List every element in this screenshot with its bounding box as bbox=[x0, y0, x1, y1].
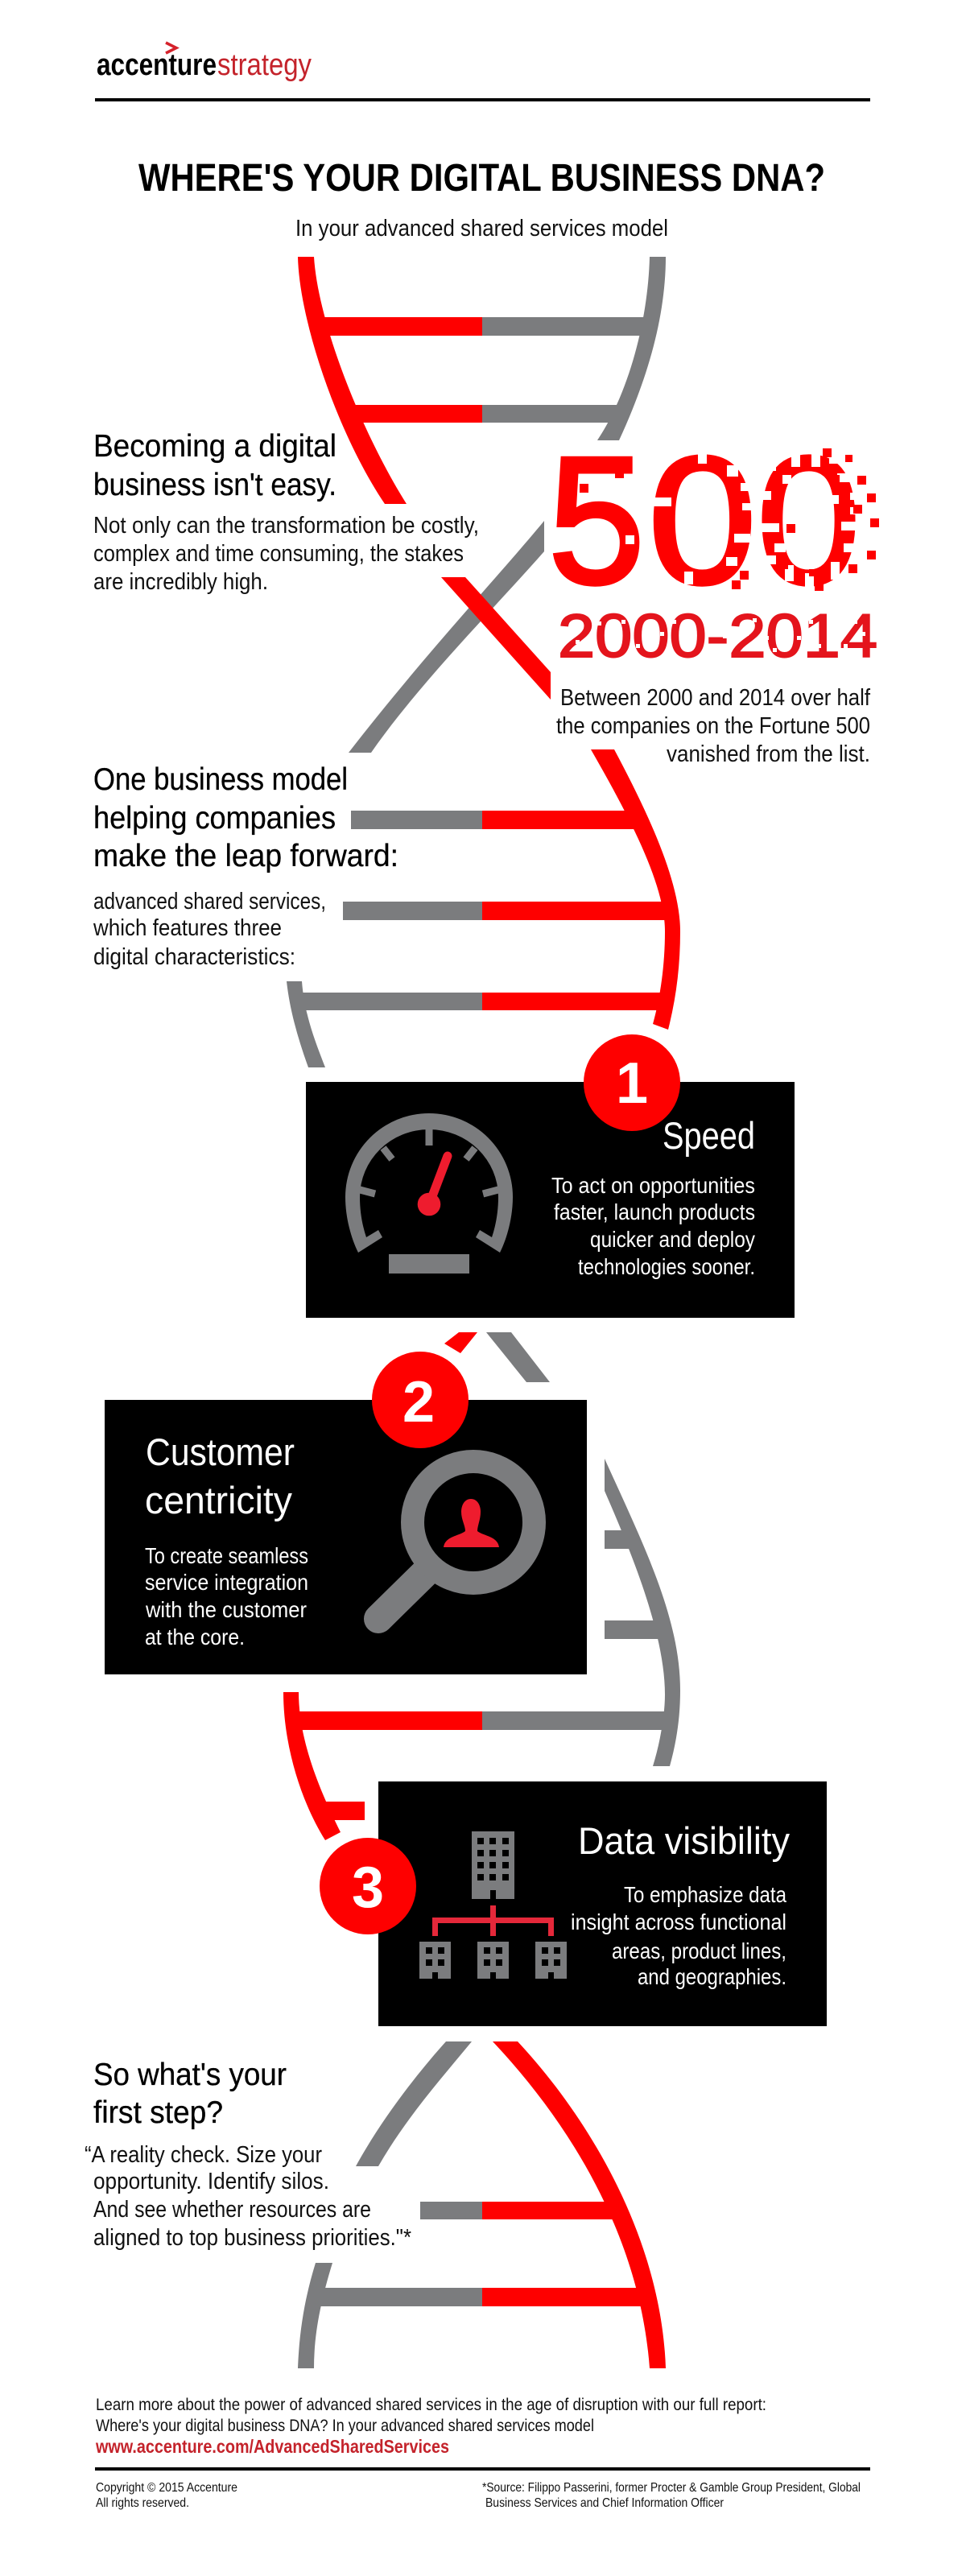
dna helix: section behind customer panel bbox=[283, 1332, 680, 1840]
speed description: quicker and deploy bbox=[590, 1227, 755, 1252]
big number: 2000-2014: 2000-2014 bbox=[558, 602, 877, 671]
panel: data visibility bbox=[378, 1781, 827, 2026]
footer: source bbox=[482, 2481, 861, 2510]
number badge 2 bbox=[372, 1352, 469, 1448]
customer description bbox=[145, 1543, 308, 1649]
speed description: faster, launch products bbox=[554, 1199, 755, 1224]
text block: becoming a digital business: Becoming a digital bbox=[93, 429, 336, 464]
text block: fortune 500 fact: the companies on the Fortune 500 bbox=[556, 713, 870, 739]
dna helix: top section bbox=[298, 257, 666, 504]
speed description bbox=[551, 1173, 755, 1279]
footer: learn more bbox=[95, 2395, 766, 2457]
speed description: technologies sooner. bbox=[578, 1254, 755, 1279]
text block: first step: “A reality check. Size your bbox=[85, 2142, 322, 2168]
text block: becoming a digital business: are incredibly high. bbox=[93, 569, 268, 595]
data visibility description: To emphasize data bbox=[624, 1882, 786, 1907]
number badge 1: 1 bbox=[616, 1051, 648, 1116]
data visibility description: insight across functional bbox=[571, 1909, 786, 1934]
text block: one business model: helping companies bbox=[93, 801, 336, 836]
text block: first step bbox=[85, 2058, 411, 2251]
data visibility heading: Data visibility bbox=[578, 1819, 790, 1862]
footer: copyright: All rights reserved. bbox=[96, 2496, 189, 2510]
logo: accenture strategy bbox=[97, 43, 312, 82]
dna helix: bottom section bbox=[298, 2041, 666, 2368]
big number: 500 disintegrating: 5 bbox=[548, 419, 645, 621]
text block: first step: opportunity. Identify silos. bbox=[93, 2169, 329, 2194]
text block: fortune 500 fact: vanished from the list. bbox=[667, 741, 870, 767]
text block: one business model: advanced shared services, bbox=[93, 889, 326, 914]
footer: learn more: Learn more about the power of advanced shared services in the age of disruption with our full report: bbox=[96, 2395, 766, 2414]
data visibility description: areas, product lines, bbox=[612, 1938, 786, 1963]
text block: fortune 500 fact bbox=[556, 685, 870, 767]
text block: becoming a digital business: Not only can the transformation be costly, bbox=[93, 513, 479, 539]
footer: source: Business Services and Chief Information Officer bbox=[485, 2496, 724, 2510]
big number: 500 disintegrating: 0 bbox=[757, 419, 861, 621]
footer: learn more: Where's your digital business DNA? In your advanced shared services model bbox=[96, 2416, 594, 2435]
customer heading bbox=[145, 1430, 295, 1521]
text block: becoming a digital business bbox=[93, 429, 479, 595]
customer heading: centricity bbox=[145, 1479, 292, 1521]
customer description: To create seamless bbox=[145, 1543, 308, 1568]
text block: one business model: which features three bbox=[93, 915, 282, 941]
subtitle: In your advanced shared services model bbox=[295, 216, 668, 242]
footer: learn more: www.accenture.com/AdvancedSharedServices bbox=[95, 2436, 449, 2457]
text block: first step: So what's your bbox=[93, 2058, 287, 2092]
text block: one business model bbox=[93, 762, 398, 970]
panel: customer centricity bbox=[105, 1400, 587, 1674]
text block: first step: And see whether resources are bbox=[93, 2197, 371, 2223]
text block: fortune 500 fact: Between 2000 and 2014 over half bbox=[560, 685, 870, 711]
icon: building hierarchy bbox=[419, 1831, 567, 1979]
footer: copyright bbox=[96, 2481, 237, 2510]
text block: first step: aligned to top business priorities."* bbox=[93, 2225, 411, 2251]
logo: accenture strategy: strategy bbox=[217, 48, 312, 82]
number badge 3: 3 bbox=[352, 1856, 384, 1920]
logo: accenture strategy: accenture bbox=[97, 48, 217, 82]
data visibility description: and geographies. bbox=[638, 1964, 786, 1989]
text block: one business model: One business model bbox=[93, 762, 348, 797]
speed heading: Speed bbox=[663, 1114, 755, 1157]
title: WHERE'S YOUR DIGITAL BUSINESS DNA? bbox=[138, 157, 825, 200]
big number: 500 disintegrating bbox=[548, 419, 879, 621]
number badge 1 bbox=[584, 1034, 680, 1131]
customer description: at the core. bbox=[145, 1624, 245, 1649]
panel: speed bbox=[306, 1082, 795, 1318]
text block: first step: first step? bbox=[93, 2095, 223, 2130]
footer: copyright: Copyright © 2015 Accenture bbox=[96, 2481, 237, 2495]
customer heading: Customer bbox=[146, 1430, 295, 1473]
customer description: service integration bbox=[145, 1570, 308, 1595]
text block: becoming a digital business: complex and time consuming, the stakes bbox=[93, 541, 464, 567]
icon: magnifier with person bbox=[378, 1462, 535, 1619]
text block: one business model: digital characteristics: bbox=[93, 944, 295, 970]
footer: source: *Source: Filippo Passerini, former Procter & Gamble Group President, Global bbox=[482, 2481, 861, 2495]
text block: becoming a digital business: business isn't easy. bbox=[93, 468, 336, 502]
data visibility description bbox=[571, 1882, 786, 1989]
dna helix: crossing strands bbox=[349, 521, 551, 753]
customer description: with the customer bbox=[145, 1597, 307, 1622]
number badge 2: 2 bbox=[402, 1370, 435, 1435]
icon: speedometer bbox=[345, 1113, 513, 1274]
text block: one business model: make the leap forward: bbox=[93, 839, 398, 873]
number badge 3 bbox=[320, 1838, 416, 1934]
big number: 500 disintegrating: 0 bbox=[648, 419, 757, 621]
speed description: To act on opportunities bbox=[551, 1173, 755, 1198]
dna helix: section behind speed panel bbox=[287, 749, 680, 1067]
